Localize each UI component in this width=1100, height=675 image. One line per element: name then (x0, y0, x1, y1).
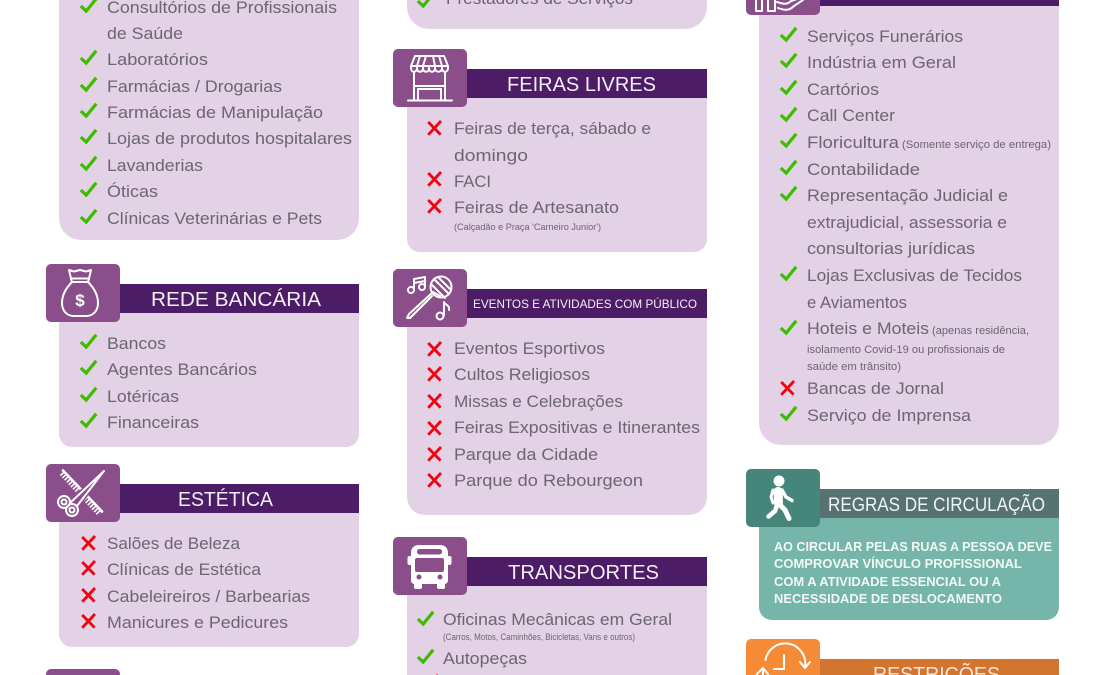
list: serviços gerais: (Somente serviço de entrega) (902, 139, 1051, 151)
list: saúde: Lojas de produtos hospitalares (107, 129, 352, 148)
list: serviços gerais: Lojas Exclusivas de Tecidos (807, 266, 1022, 285)
panel: serviços, cropped (407, 0, 707, 29)
icon: walking person (746, 469, 820, 527)
icon: comb and scissors (46, 464, 120, 522)
header: estética: ESTÉTICA (178, 488, 273, 511)
list: serviços gerais: consultorias jurídicas (807, 239, 975, 258)
list: eventos: Parque do Rebourgeon (454, 471, 643, 490)
icon: bus (393, 537, 467, 595)
list: rede bancária: Financeiras (107, 413, 199, 432)
list: serviços gerais: saúde em trânsito) (807, 361, 901, 373)
text: regras: COM A ATIVIDADE ESSENCIAL OU A (774, 574, 1002, 589)
header: regras de circulação: REGRAS DE CIRCULAÇÃO (828, 492, 1045, 516)
panel: saúde (59, 0, 359, 240)
list: serviços gerais: Bancas de Jornal (807, 379, 944, 398)
list: serviços gerais: Cartórios (807, 80, 879, 99)
panel: regras de circulação (746, 469, 1059, 620)
list: estética: Cabeleireiros / Barbearias (107, 587, 310, 606)
list: rede bancária (81, 334, 257, 432)
list: feiras livres: (Calçadão e Praça 'Carneiro Junior') (454, 222, 601, 232)
list: saúde: Óticas (107, 182, 158, 201)
panel: transportes (393, 537, 707, 675)
list: saúde: Farmácias de Manipulação (107, 103, 323, 122)
list: serviços gerais: extrajudicial, assessoria e (807, 213, 1007, 232)
icon: microphone and notes (393, 269, 467, 327)
list: transportes: Autopeças (443, 649, 527, 668)
text: regras: COMPROVAR VÍNCULO PROFISSIONAL (774, 556, 1022, 571)
list: estética: Salões de Beleza (107, 534, 241, 553)
list: eventos: Eventos Esportivos (454, 339, 605, 358)
text: regras: NECESSIDADE DE DESLOCAMENTO (774, 591, 1002, 606)
header: estética (110, 484, 359, 513)
list: eventos: Cultos Religiosos (454, 365, 590, 384)
list: feiras livres: Feiras de Artesanato (454, 198, 619, 217)
list: serviços gerais: Indústria em Geral (807, 53, 956, 72)
list: serviços gerais: Representação Judicial e (807, 186, 1008, 205)
header: rede bancária: REDE BANCÁRIA (151, 288, 321, 311)
icon: hand, cropped (746, 0, 820, 15)
text: regras (774, 539, 1052, 606)
list: rede bancária: Bancos (107, 334, 166, 353)
list: serviços gerais: Floricultura (807, 133, 900, 152)
panel: feiras livres (393, 49, 707, 252)
list: transportes (418, 610, 672, 675)
list: saúde: de Saúde (107, 24, 183, 43)
list: estética: Manicures e Pedicures (107, 613, 288, 632)
list: rede bancária: Agentes Bancários (107, 360, 257, 379)
list: serviços gerais: (apenas residência, (932, 325, 1029, 337)
header: eventos: EVENTOS E ATIVIDADES COM PÚBLICO (473, 298, 697, 311)
list: saúde (81, 0, 352, 228)
list: eventos: Missas e Celebrações (454, 392, 623, 411)
list: feiras livres: FACI (454, 172, 491, 191)
list: serviços gerais (781, 27, 1051, 425)
list: serviços gerais: Serviço de Imprensa (807, 406, 972, 425)
header: restrições (810, 659, 1059, 675)
list: transportes: (Carros, Motos, Caminhões, Bicicletas, Vans e outros) (443, 632, 635, 642)
list: serviços gerais: Serviços Funerários (807, 27, 963, 46)
icon: market stall (393, 49, 467, 107)
panel: restrições, cropped (746, 639, 1059, 675)
panel: serviços gerais (746, 0, 1059, 445)
list: feiras livres: domingo (454, 146, 528, 165)
header: rede bancária (110, 284, 359, 313)
list: serviços gerais: Call Center (807, 106, 895, 125)
list: serviços gerais: e Aviamentos (807, 293, 907, 312)
list: saúde: Clínicas Veterinárias e Pets (107, 209, 322, 228)
header: transportes (457, 557, 707, 586)
text: regras: AO CIRCULAR PELAS RUAS A PESSOA DEVE (774, 539, 1052, 554)
list: eventos (428, 339, 700, 490)
list: estética: Clínicas de Estética (107, 560, 262, 579)
icon: next section tab, cropped (46, 669, 120, 675)
header: regras de circulação (810, 489, 1059, 518)
list: serviços gerais: Contabilidade (807, 160, 920, 179)
list: saúde: Laboratórios (107, 50, 208, 69)
header: serviços gerais, cropped (810, 0, 1059, 6)
header: eventos (457, 289, 707, 318)
list: feiras livres (428, 119, 651, 232)
panel: rede bancária (46, 264, 359, 447)
list: feiras livres: Feiras de terça, sábado e (454, 119, 651, 138)
list: serviços gerais: isolamento Covid-19 ou profissionais de (807, 344, 1005, 356)
header: transportes: TRANSPORTES (508, 561, 659, 584)
list: rede bancária: Lotéricas (107, 387, 179, 406)
header: feiras livres: FEIRAS LIVRES (507, 73, 656, 96)
list: transportes: Oficinas Mecânicas em Geral (443, 610, 672, 629)
list: eventos: Parque da Cidade (454, 445, 598, 464)
list: saúde: Lavanderias (107, 156, 203, 175)
icon: clock with arrows (746, 639, 820, 675)
list: estética (82, 534, 310, 632)
list: eventos: Feiras Expositivas e Itinerantes (454, 418, 700, 437)
panel: estética (46, 464, 359, 647)
icon: money bag (46, 264, 120, 322)
panel: eventos e atividades com público (393, 269, 707, 515)
list: serviços gerais: Hoteis e Moteis (807, 319, 929, 338)
header: feiras livres (457, 69, 707, 98)
list: saúde: Farmácias / Drogarias (107, 77, 282, 96)
icon: money bag: $ (75, 291, 85, 310)
